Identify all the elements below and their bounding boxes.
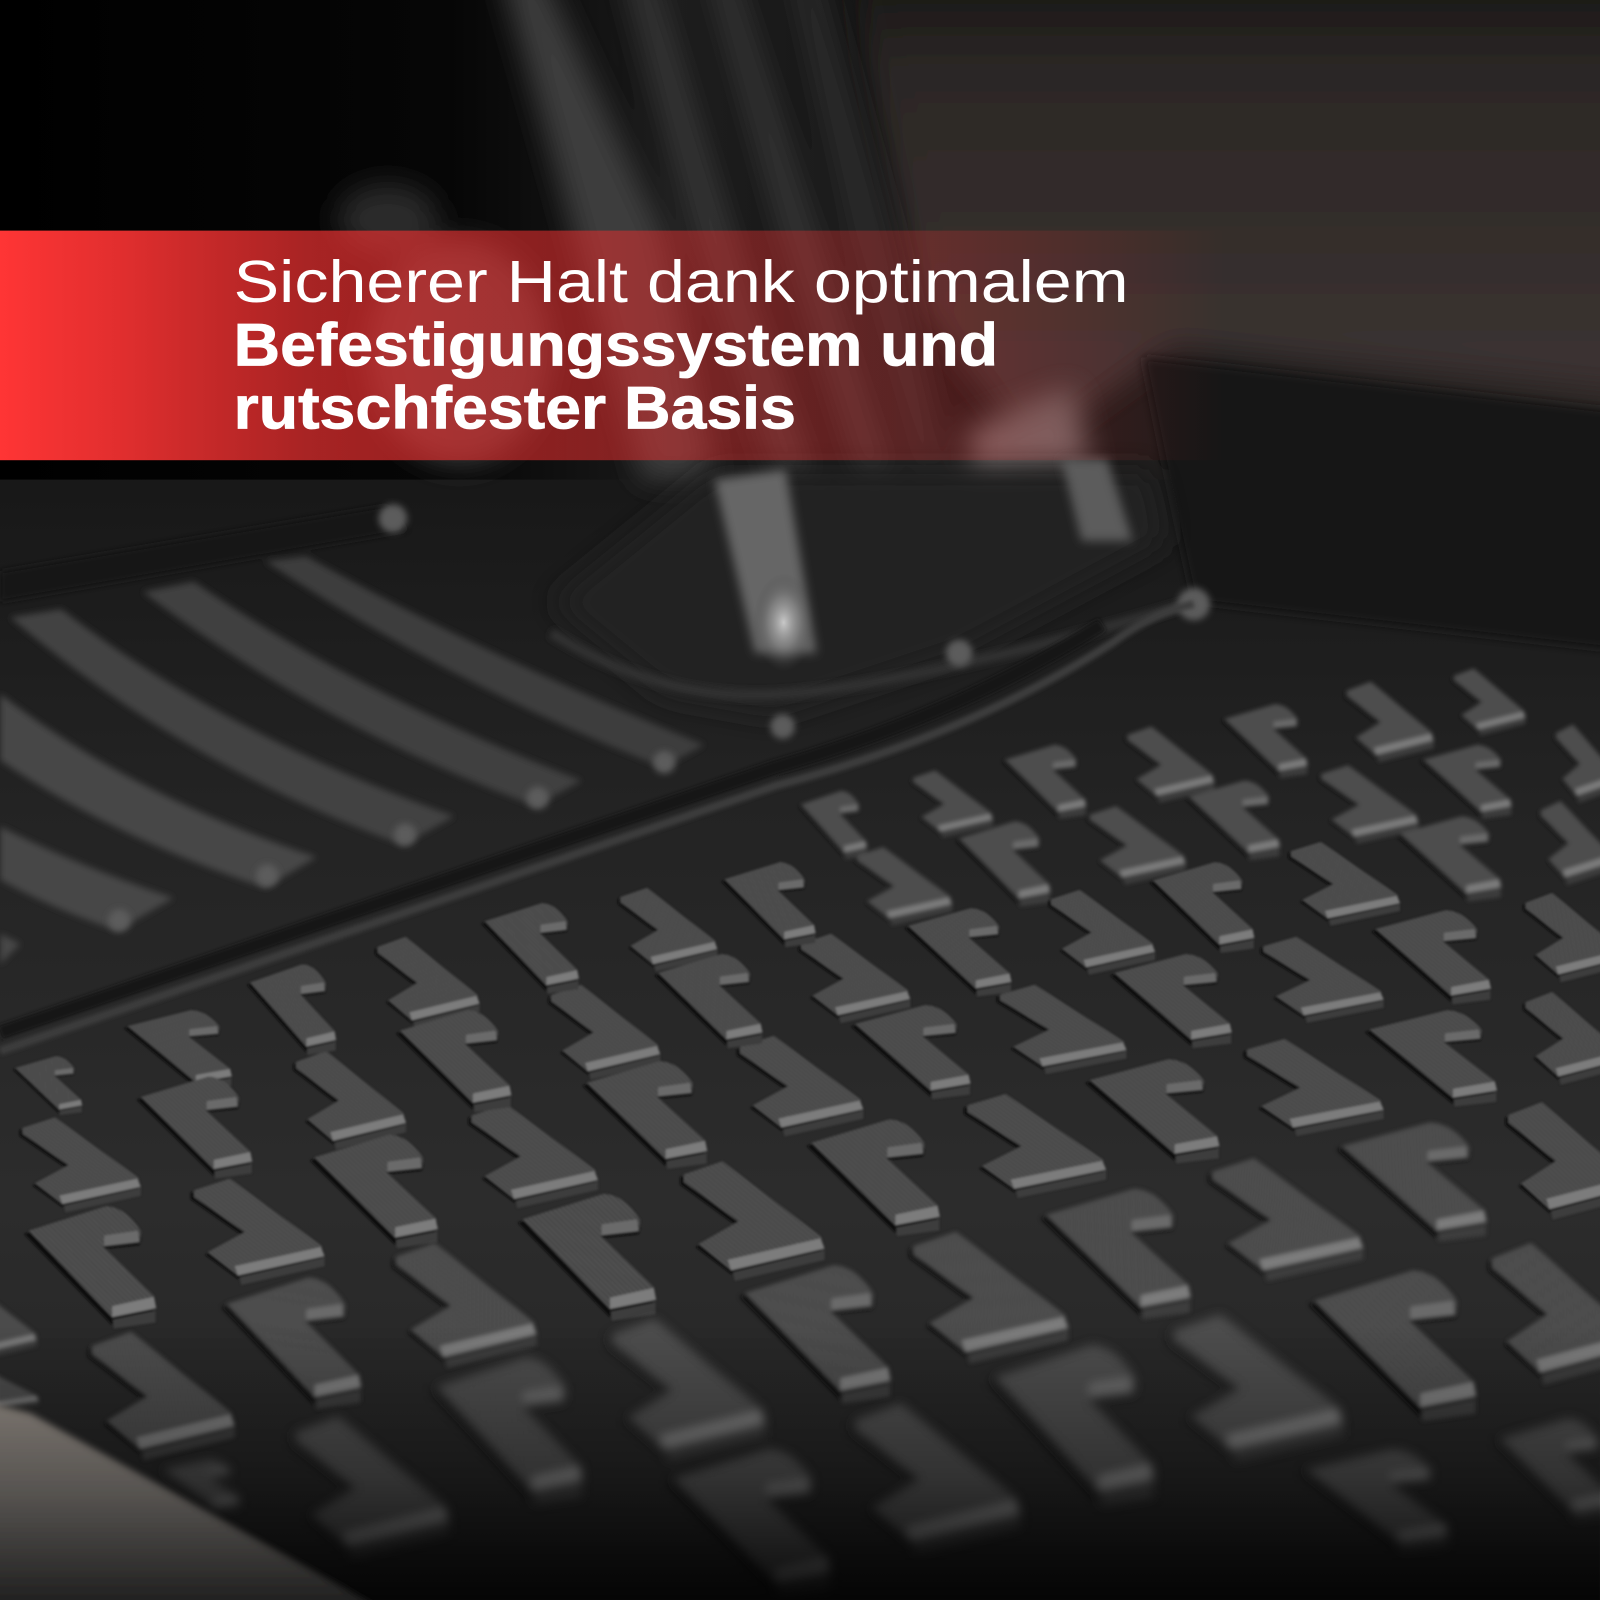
red gradient banner [0, 231, 1224, 460]
background: dark car interior top area [0, 0, 1600, 653]
tread blocks: closest blurred rows [161, 1314, 1600, 1596]
mat: diagonal crease [0, 604, 1194, 1051]
headline line 1: Sicherer Halt dank optimalem [234, 248, 1129, 315]
tread blocks: near rows [0, 1122, 1600, 1460]
headline line 3: rutschfester Basis [234, 375, 796, 442]
tread blocks: far rows [799, 668, 1600, 925]
headline [234, 248, 1129, 442]
headline line 2: Befestigungssystem und [234, 311, 998, 378]
bottom shading [0, 1327, 1600, 1600]
mat: studs at rib ends [108, 504, 1210, 932]
pedal base with metal highlights [551, 459, 1194, 714]
tread blocks: middle rows [13, 842, 1600, 1329]
background: rubber mat surface [0, 459, 1600, 1600]
foreground: pale corner at bottom left [0, 1400, 388, 1600]
pedal: blurred vertical ribs [337, 0, 1092, 480]
mat: footrest ribs at upper left [0, 505, 704, 964]
